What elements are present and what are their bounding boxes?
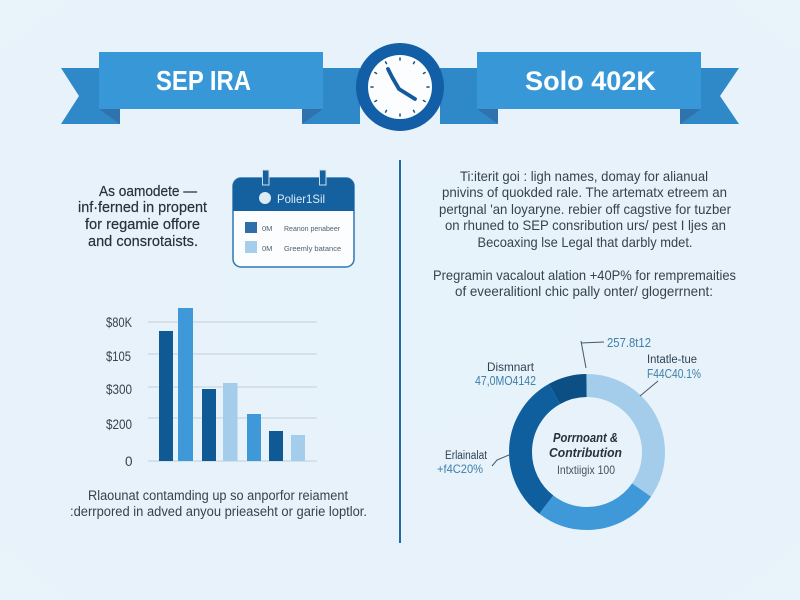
text block: right note bbox=[433, 267, 736, 299]
text block: chart caption: :derrpored in adved anyou prieaseht or garie loptlor. bbox=[70, 504, 367, 519]
text block: left intro bbox=[78, 184, 207, 250]
callout: Intatle-tue: Intatle-tue bbox=[647, 354, 697, 366]
callout: Intatle-tue: F44C40.1% bbox=[647, 367, 701, 381]
text block: right paragraph: Ti:iterit goi : ligh names, domay for alianual bbox=[460, 168, 708, 184]
text block: left intro: for regamie offore bbox=[85, 217, 200, 233]
divider bbox=[399, 160, 401, 543]
text block: right note: of eveeralitionl chic pally onter/ glogerrnent: bbox=[455, 283, 713, 299]
text block: left intro: and consrotaists. bbox=[88, 234, 198, 250]
text block: right paragraph: Becoaxing lse Legal that darbly mdet. bbox=[478, 234, 692, 250]
right ribbon: Solo 402K: Solo 402K bbox=[525, 66, 657, 96]
icon: calendar card: Greemly batance bbox=[284, 244, 341, 253]
callout: top value: 257.8t12 bbox=[607, 336, 651, 350]
text block: left intro: inf·ferned in propent bbox=[78, 200, 207, 216]
donut chart bbox=[520, 386, 654, 518]
donut centre label: Porrnoant & bbox=[553, 430, 618, 445]
callout: Intatle-tue bbox=[640, 354, 701, 396]
text block: chart caption: Rlaounat contamding up so anporfor reiament bbox=[88, 488, 348, 503]
right ribbon: Solo 402K bbox=[440, 52, 739, 124]
bar chart: $200 bbox=[106, 417, 132, 432]
icon: calendar card: Polier1Sil bbox=[277, 192, 325, 206]
icon: clock bbox=[356, 43, 444, 131]
icon: calendar card: 0M bbox=[262, 224, 272, 233]
bar chart bbox=[106, 308, 317, 469]
callout: top value bbox=[581, 336, 651, 368]
icon: calendar card: 0M bbox=[262, 244, 272, 253]
text block: right paragraph: pertgnal 'an loyaryne. rebier off cagstive for tuzber bbox=[439, 201, 731, 217]
callout: Dismnart: Dismnart bbox=[487, 360, 535, 374]
callout: Erlainalat bbox=[437, 450, 509, 476]
text block: right paragraph: pnivins of quokded rale. The artematx etreem an bbox=[442, 184, 727, 200]
bar chart: 0 bbox=[125, 454, 133, 469]
donut centre label: Contribution bbox=[549, 445, 622, 460]
callout: Erlainalat: Erlainalat bbox=[445, 450, 488, 462]
callout: Dismnart bbox=[475, 360, 536, 388]
callout: Dismnart: 47,0MO4142 bbox=[475, 374, 536, 388]
donut centre label: Intxtiigix 100 bbox=[557, 463, 615, 477]
bar chart: $300 bbox=[106, 382, 132, 397]
text block: right paragraph bbox=[439, 168, 731, 250]
text block: right note: Pregramin vacalout alation +40P% for rempremaities bbox=[433, 267, 736, 283]
icon: calendar card bbox=[233, 170, 354, 267]
text block: left intro: As oamodete — bbox=[99, 184, 197, 200]
callout: Erlainalat: +f4C20% bbox=[437, 462, 483, 476]
donut centre label bbox=[549, 430, 622, 477]
left ribbon: SEP IRA: SEP IRA bbox=[156, 65, 251, 96]
text block: right paragraph: on rhuned to SEP consribution urs/ pest I ljes an bbox=[445, 217, 726, 233]
bar chart: $80K bbox=[106, 315, 132, 330]
text block: chart caption bbox=[70, 488, 367, 519]
icon: calendar card: Reanon penabeer bbox=[284, 226, 341, 233]
bar chart: $105 bbox=[106, 349, 131, 364]
left ribbon: SEP IRA bbox=[61, 52, 360, 124]
